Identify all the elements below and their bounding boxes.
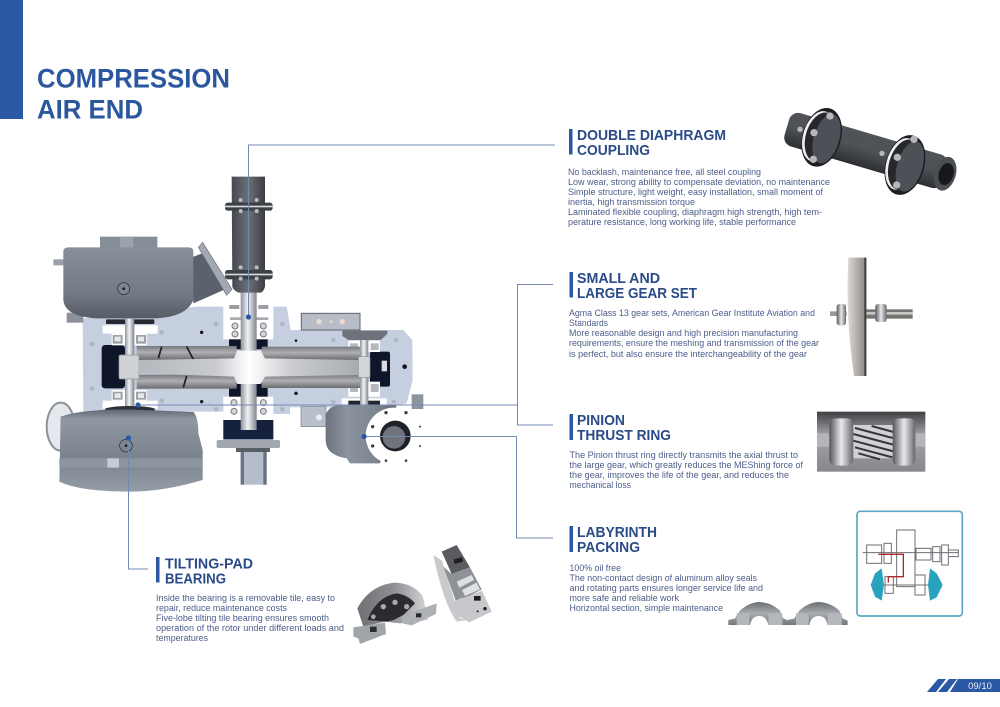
panel: pinion thrust ring <box>570 412 925 491</box>
heading <box>570 524 657 556</box>
main machine cutaway illustration <box>47 177 423 492</box>
right bearing bays <box>342 331 387 405</box>
description: The non-contact design of aluminum alloy seals <box>570 573 757 584</box>
description: Low wear, strong ability to compensate deviation, no maintenance <box>568 177 830 188</box>
heading <box>569 127 726 159</box>
center lower bearing bay <box>223 381 273 439</box>
large gear disc <box>140 351 358 384</box>
description: operation of the rotor under different loads and <box>156 623 344 634</box>
gear hubs <box>137 346 360 389</box>
description: perature resistance, long working life, stable performance <box>568 217 796 228</box>
heading: SMALL AND <box>577 270 660 287</box>
heading: DOUBLE DIAPHRAGM <box>577 127 726 144</box>
panel: tilting-pad bearing <box>156 545 492 644</box>
image: bearing pads <box>353 545 492 644</box>
description: Inside the bearing is a removable tile, easy to <box>156 593 335 604</box>
upper volute elbow <box>192 242 232 303</box>
page number badge <box>927 679 1000 692</box>
page number badge: 09/10 <box>968 681 992 692</box>
image: pinion photo <box>817 412 925 472</box>
image: labyrinth seals <box>728 602 848 625</box>
description: repair, reduce maintenance costs <box>156 603 287 614</box>
description <box>570 563 763 614</box>
left pinion <box>119 355 139 379</box>
left cavity <box>102 345 125 388</box>
description: Agma Class 13 gear sets, American Gear Institute Aviation and <box>569 308 815 319</box>
description: temperatures <box>156 633 208 644</box>
title: AIR END <box>37 94 143 124</box>
description: more safe and reliable work <box>570 593 679 604</box>
description: the large gear, which greatly reduces the MEShing force of <box>570 460 803 471</box>
panel: small and large gear set <box>569 258 913 376</box>
heading: LARGE GEAR SET <box>577 285 697 302</box>
lower volute flange <box>47 403 75 451</box>
bearing seat disc <box>105 406 155 413</box>
title: COMPRESSION <box>37 64 230 94</box>
upper plate <box>301 313 360 330</box>
description: Standards <box>569 318 608 329</box>
heading: BEARING <box>165 570 226 588</box>
heading <box>156 556 253 588</box>
description: and rotating parts ensures longer service life and <box>570 583 763 594</box>
description: No backlash, maintenance free, all steel coupling <box>568 167 761 178</box>
heading <box>570 412 671 444</box>
description: Laminated flexible coupling, diaphragm high strength, high tem- <box>568 207 822 218</box>
heading <box>570 270 697 302</box>
description: requirements, ensure the meshing and transmission of the gear <box>569 338 820 349</box>
right pinion <box>358 357 370 377</box>
lower volute housing <box>59 409 203 492</box>
description: Simple structure, light weight, easy installation, small moment of <box>568 187 823 198</box>
casing cross-section <box>83 307 413 440</box>
description <box>156 593 344 644</box>
description <box>568 167 830 228</box>
right volute housing <box>326 405 397 463</box>
description: Five-lobe tilting tile bearing ensures smooth <box>156 613 329 624</box>
bottom flange <box>217 440 280 448</box>
left bearing bays <box>103 319 158 409</box>
right cavity <box>370 352 390 387</box>
description: the gear, improves the life of the gear, and reduces the <box>570 470 789 481</box>
heading: PINION <box>577 412 625 429</box>
leader line: labyrinth packing <box>361 434 553 538</box>
image: gear train diagram <box>857 511 962 616</box>
description <box>570 450 803 491</box>
upright coupling <box>225 177 273 293</box>
casing bolt holes <box>90 322 407 412</box>
title <box>37 64 230 124</box>
leader line: coupling <box>246 145 555 320</box>
image: gear set <box>830 258 913 376</box>
upper volute housing <box>53 237 193 323</box>
shafts <box>125 290 368 430</box>
heading: COUPLING <box>577 142 650 159</box>
leader line: tilting-pad bearing <box>126 435 148 569</box>
bottom drive block <box>236 448 270 485</box>
leader line: gear set and thrust ring <box>135 284 553 425</box>
description: inertia, high transmission torque <box>568 197 695 208</box>
description: is perfect, but also ensure the interchangeability of the gear <box>569 349 808 360</box>
description: More reasonable design and high precision manufacturing <box>569 328 798 339</box>
heading: PACKING <box>577 539 640 556</box>
lower bracket <box>301 407 326 427</box>
image: coupling <box>782 103 960 200</box>
heading: TILTING-PAD <box>165 556 253 572</box>
right volute outlet flange <box>366 408 422 464</box>
description: The Pinion thrust ring directly transmits the axial thrust to <box>570 450 798 461</box>
center upper bearing bay <box>223 305 273 349</box>
panel: labyrinth packing <box>570 511 962 625</box>
description <box>569 308 820 360</box>
description: Horizontal section, simple maintenance <box>570 603 723 614</box>
panel: double diaphragm coupling <box>568 103 960 228</box>
right drain stub <box>412 394 423 409</box>
heading: THRUST RING <box>577 427 671 444</box>
description: 100% oil free <box>570 563 621 574</box>
description: mechanical loss <box>570 480 631 491</box>
corner accent bar <box>0 0 23 119</box>
heading: LABYRINTH <box>577 524 657 541</box>
